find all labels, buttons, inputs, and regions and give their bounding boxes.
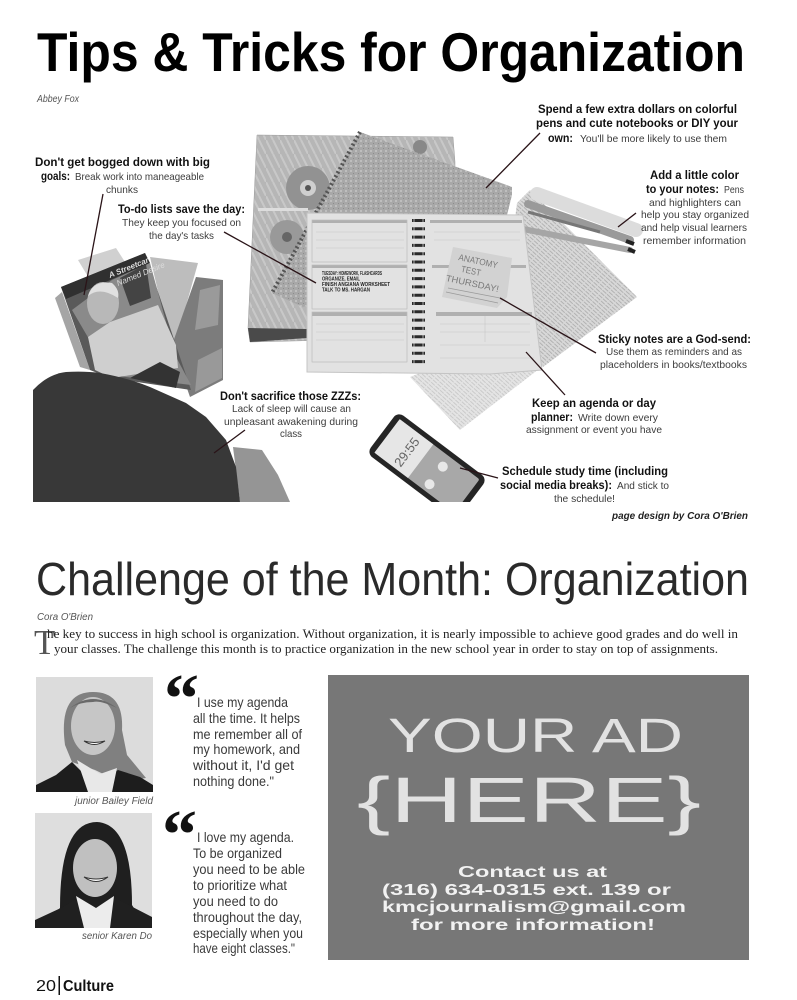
callout: agenda bbox=[526, 352, 662, 436]
callout: sleep bbox=[214, 389, 361, 453]
quote: Karen Do bbox=[162, 797, 305, 956]
quote: Karen Do: throughout the day, bbox=[193, 909, 302, 925]
quote: Karen Do: To be organized bbox=[193, 845, 282, 861]
callout: to-do lists: To-do lists save the day: bbox=[118, 202, 245, 216]
callout: study time: Schedule study time (including bbox=[502, 464, 668, 478]
planner: handwritten to-do list: TALK TO MS. HARGAN bbox=[322, 288, 370, 294]
callout: add color to notes bbox=[618, 168, 749, 247]
advertisement: Contact us at bbox=[458, 864, 607, 881]
callout: study time: And stick to bbox=[617, 480, 669, 492]
callout: colorful pens and notebooks bbox=[486, 102, 738, 188]
advertisement: kmcjournalism@gmail.com bbox=[382, 899, 686, 916]
byline: Cora O'Brien: Cora O'Brien bbox=[37, 612, 93, 623]
advertisement: (316) 634-0315 ext. 139 or bbox=[382, 882, 671, 899]
planner: handwritten to-do list: FINISH ANGIANA WORKSHEET bbox=[322, 282, 390, 288]
photo: pens and highlighters bbox=[523, 194, 636, 252]
advertisement bbox=[328, 675, 749, 960]
callout: colorful pens and notebooks: pens and cute notebooks or DIY your bbox=[536, 116, 738, 130]
quote mark: “ bbox=[162, 797, 197, 874]
sticky note: THURSDAY! bbox=[445, 273, 500, 294]
callout: agenda: planner: bbox=[531, 410, 573, 424]
photo: shoulder bbox=[233, 447, 290, 502]
callout: study time: the schedule! bbox=[554, 493, 615, 505]
callout: big goals bbox=[35, 155, 210, 295]
advertisement: YOUR AD bbox=[388, 710, 683, 763]
planner: spiral binding bbox=[412, 219, 425, 366]
quote: Karen Do: you need to do bbox=[193, 893, 278, 909]
callout: big goals: chunks bbox=[106, 184, 138, 196]
callout: add color to notes: Add a little color bbox=[650, 168, 739, 182]
callout: sleep: unpleasant awakening during bbox=[224, 416, 358, 428]
sticky note: TEST bbox=[460, 264, 482, 278]
title: Tips & Tricks for Organization bbox=[37, 21, 745, 83]
footer: page number and section: Culture bbox=[63, 978, 114, 995]
callout: colorful pens and notebooks: own: bbox=[548, 131, 573, 145]
footer: page number and section: 20 bbox=[36, 978, 56, 995]
callout: sticky notes: Use them as reminders and as bbox=[606, 346, 742, 358]
callout: add color to notes: remember information bbox=[643, 235, 746, 247]
footer: page number and section bbox=[36, 976, 114, 995]
portrait: Karen Do bbox=[35, 813, 152, 928]
intro paragraph with drop cap bbox=[34, 623, 739, 662]
sticky note bbox=[442, 247, 512, 308]
photo: stack of books: A Streetcar bbox=[106, 255, 151, 280]
photo: glitter spiral notebook bbox=[272, 132, 512, 307]
quote: Bailey Field: without it, I'd get bbox=[192, 757, 294, 773]
caption: senior Karen Do: senior Karen Do bbox=[82, 931, 152, 942]
advertisement: for more information! bbox=[411, 917, 655, 934]
callout: agenda: Write down every bbox=[578, 412, 659, 424]
callout: sleep: Lack of sleep will cause an bbox=[232, 403, 351, 415]
quote: Bailey Field bbox=[164, 661, 302, 789]
credit: page design: page design by Cora O'Brien bbox=[611, 511, 748, 522]
callout: add color to notes: to your notes: bbox=[646, 182, 719, 196]
planner: handwritten to-do list: TUESDAY: HOMEWORK, FLASHCARDS bbox=[322, 271, 382, 277]
callout: add color to notes: and highlighters can bbox=[649, 197, 741, 209]
callout: agenda: assignment or event you have bbox=[526, 424, 662, 436]
quote mark: “ bbox=[164, 661, 199, 738]
sticky note: ANATOMY bbox=[458, 252, 499, 270]
callout: big goals: Break work into maneageable bbox=[75, 171, 204, 183]
callout: to-do lists: They keep you focused on bbox=[122, 217, 241, 229]
planner: handwritten to-do list: ORGANIZE, EMAIL bbox=[322, 276, 360, 282]
caption: junior Bailey Field: junior Bailey Field bbox=[73, 796, 153, 807]
photo collage bbox=[33, 132, 637, 520]
planner: handwritten to-do list bbox=[322, 271, 390, 294]
callout: agenda: Keep an agenda or day bbox=[532, 396, 656, 410]
photo: floral notebook bbox=[248, 135, 455, 342]
callout: study time bbox=[460, 464, 669, 505]
callout: colorful pens and notebooks: You'll be more likely to use them bbox=[580, 133, 727, 145]
callout: big goals: Don't get bogged down with big bbox=[35, 155, 210, 169]
callout: to-do lists: the day's tasks bbox=[149, 230, 214, 242]
quote: Bailey Field: nothing done." bbox=[193, 773, 274, 789]
callout: sticky notes bbox=[500, 298, 751, 371]
photo: smartphone: 29:55 bbox=[391, 435, 423, 470]
callout: big goals: goals: bbox=[41, 169, 70, 183]
quote: Bailey Field: I use my agenda bbox=[197, 694, 288, 710]
callout: sleep: Don't sacrifice those ZZZs: bbox=[220, 389, 361, 403]
quote: Karen Do: you need to be able bbox=[193, 861, 305, 877]
photo: stack of books: Named Desire bbox=[115, 260, 167, 288]
callout: add color to notes: help you stay organized bbox=[641, 209, 749, 221]
photo: person's hair bbox=[33, 372, 240, 502]
callout: sleep: class bbox=[280, 428, 302, 440]
portrait: Bailey Field bbox=[36, 677, 153, 792]
quote: Bailey Field: my homework, and bbox=[193, 741, 300, 757]
callout: sticky notes: Sticky notes are a God-send: bbox=[598, 332, 751, 346]
callout: add color to notes: and help visual learners bbox=[641, 222, 747, 234]
byline: Abbey Fox: Abbey Fox bbox=[36, 94, 80, 105]
intro paragraph with drop cap: your classes. The challenge this month is to practice organization in the new school year in order to stay on top of assignments. bbox=[54, 642, 718, 656]
photo: open planner bbox=[307, 213, 542, 374]
callout: sticky notes: placeholders in books/textbooks bbox=[600, 359, 747, 371]
photo: stack of books bbox=[55, 248, 223, 397]
quote: Karen Do: especially when you bbox=[193, 925, 303, 941]
callout: to-do lists bbox=[118, 202, 316, 283]
quote: Karen Do: have eight classes." bbox=[193, 940, 295, 956]
photo: smartphone bbox=[369, 414, 485, 502]
intro paragraph with drop cap: T bbox=[34, 623, 55, 662]
quote: Karen Do: to prioritize what bbox=[193, 877, 287, 893]
heading: challenge of the month: Challenge of the Month: Organization bbox=[36, 553, 749, 605]
quote: Bailey Field: all the time. It helps bbox=[193, 710, 300, 726]
intro paragraph with drop cap: he key to success in high school is organization. Without organization, it is nearly impossible to achieve good grades and do well in bbox=[47, 627, 739, 641]
quote: Karen Do: I love my agenda. bbox=[197, 829, 294, 845]
photo: loose papers bbox=[410, 190, 637, 430]
callout: study time: social media breaks): bbox=[500, 478, 612, 492]
quote: Bailey Field: me remember all of bbox=[193, 726, 302, 742]
callout: colorful pens and notebooks: Spend a few extra dollars on colorful bbox=[538, 102, 737, 116]
callout: add color to notes: Pens bbox=[724, 184, 744, 196]
advertisement: {HERE} bbox=[357, 764, 701, 836]
book cover: front bbox=[61, 253, 191, 390]
